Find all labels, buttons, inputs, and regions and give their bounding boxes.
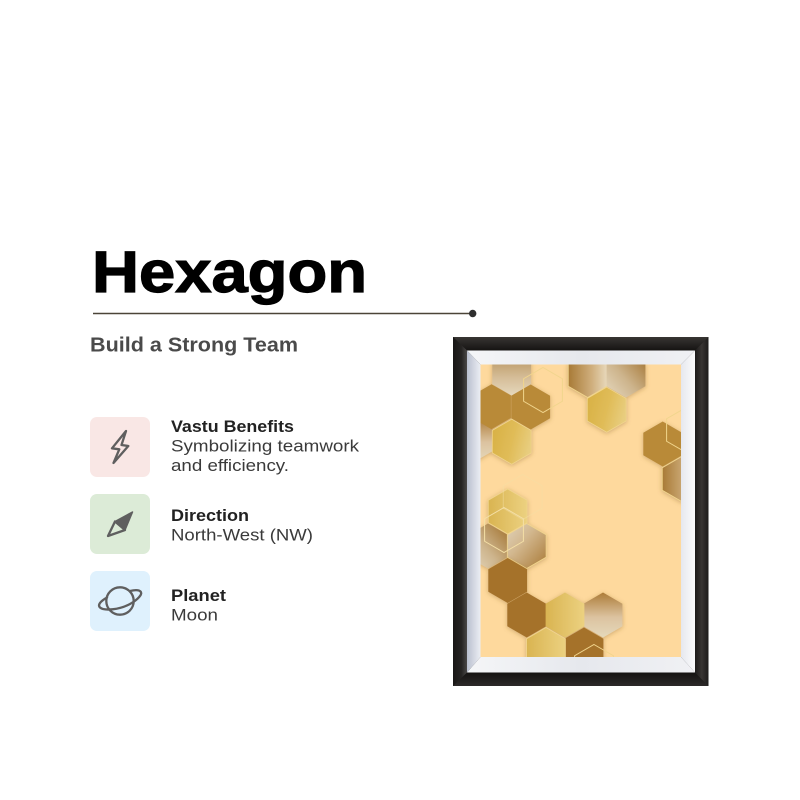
benefits text: and efficiency. <box>171 457 289 475</box>
subtitle: Build a Strong Team <box>90 334 298 356</box>
direction text: North-West (NW) <box>171 526 313 544</box>
benefits text: Vastu Benefits <box>171 418 294 436</box>
direction text: Direction <box>171 507 249 525</box>
icon: lightning bolt <box>90 417 150 477</box>
panel: planet <box>90 571 227 631</box>
benefits text: Symbolizing teamwork <box>171 438 360 456</box>
title rule with end dot <box>93 310 476 317</box>
frame: dark outer moulding <box>453 337 708 686</box>
planet text: Moon <box>171 606 218 624</box>
honeycomb hexagons <box>480 364 681 657</box>
direction text <box>171 507 313 544</box>
icon: compass needle <box>90 494 150 554</box>
planet text: Planet <box>171 587 227 605</box>
panel: direction <box>90 494 313 554</box>
frame: white mat <box>467 350 695 672</box>
artwork background <box>480 364 681 657</box>
planet text <box>171 587 227 624</box>
icon: ringed planet <box>90 571 150 631</box>
title: Hexagon <box>92 240 367 305</box>
panel: vastu benefits <box>90 417 360 477</box>
framed hexagon artwork <box>453 337 708 690</box>
benefits text <box>171 418 360 475</box>
